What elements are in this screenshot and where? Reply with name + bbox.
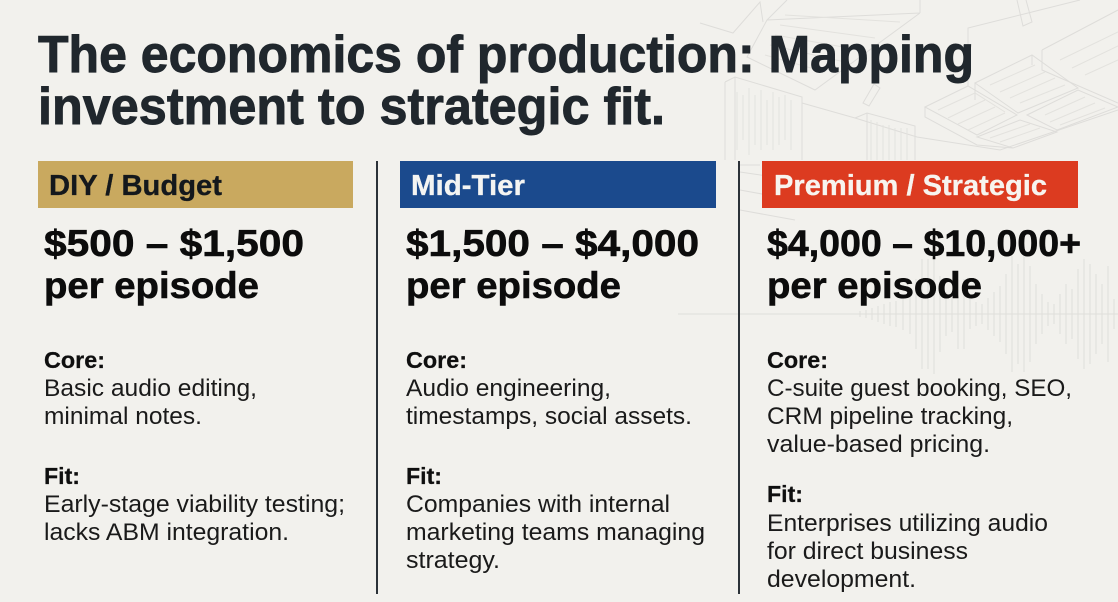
fit: Premium / Strategic (767, 481, 1048, 593)
core: DIY / Budget: Core: (44, 347, 105, 373)
header: Premium / Strategic: Premium / Strategic (774, 170, 1047, 202)
fit: Premium / Strategic: Fit: (767, 481, 803, 507)
core: Mid-Tier: Core: (406, 347, 467, 373)
core: Premium / Strategic: CRM pipeline tracking, (767, 403, 1013, 430)
price: DIY / Budget: $500 – $1,500 (44, 223, 304, 264)
header: DIY / Budget: DIY / Budget (49, 170, 222, 202)
fit: Premium / Strategic: for direct business (767, 538, 968, 565)
core: Premium / Strategic (767, 347, 1072, 458)
fit: DIY / Budget (44, 463, 345, 546)
panel: Mid-Tier (400, 161, 716, 574)
price: Mid-Tier: $1,500 – $4,000 (406, 223, 699, 264)
title: investment to strategic fit. (38, 78, 665, 136)
fit: Mid-Tier: Fit: (406, 463, 442, 489)
price: Premium / Strategic: per episode (767, 265, 982, 306)
core: DIY / Budget: minimal notes. (44, 403, 202, 430)
price: Premium / Strategic: $4,000 – $10,000+ (767, 223, 1081, 264)
fit: DIY / Budget: Fit: (44, 463, 80, 489)
title: The economics of production: Mapping (38, 26, 974, 84)
price: DIY / Budget: per episode (44, 265, 259, 306)
header: Mid-Tier: Mid-Tier (411, 170, 525, 202)
header: Mid-Tier (400, 161, 716, 208)
core: Premium / Strategic: value-based pricing. (767, 431, 990, 458)
core: DIY / Budget: Basic audio editing, (44, 375, 257, 402)
core: Mid-Tier (406, 347, 692, 430)
header: DIY / Budget (38, 161, 353, 208)
panel: DIY / Budget (38, 161, 353, 546)
fit: DIY / Budget: lacks ABM integration. (44, 519, 289, 546)
core: Mid-Tier: timestamps, social assets. (406, 403, 692, 430)
core: DIY / Budget (44, 347, 257, 430)
title (38, 26, 974, 136)
divider between DIY and Mid-Tier (376, 161, 378, 594)
header: Premium / Strategic (762, 161, 1078, 208)
fit: Premium / Strategic: Enterprises utilizing audio (767, 510, 1048, 537)
background: audio waveform (678, 254, 1118, 374)
fit: Mid-Tier: strategy. (406, 547, 500, 574)
core: Premium / Strategic: C-suite guest booking, SEO, (767, 375, 1072, 402)
panel: Premium / Strategic (762, 161, 1081, 593)
price: DIY / Budget (44, 223, 304, 306)
price: Mid-Tier (406, 223, 699, 306)
fit: Mid-Tier (406, 463, 705, 574)
fit: Mid-Tier: marketing teams managing (406, 519, 705, 546)
background: architectural studio line art (700, 0, 1118, 220)
fit: DIY / Budget: Early-stage viability testing; (44, 491, 345, 518)
price: Premium / Strategic (767, 223, 1081, 306)
core: Premium / Strategic: Core: (767, 347, 828, 373)
core: Mid-Tier: Audio engineering, (406, 375, 611, 402)
price: Mid-Tier: per episode (406, 265, 621, 306)
fit: Premium / Strategic: development. (767, 566, 916, 593)
fit: Mid-Tier: Companies with internal (406, 491, 670, 518)
divider between Mid-Tier and Premium (738, 161, 740, 594)
